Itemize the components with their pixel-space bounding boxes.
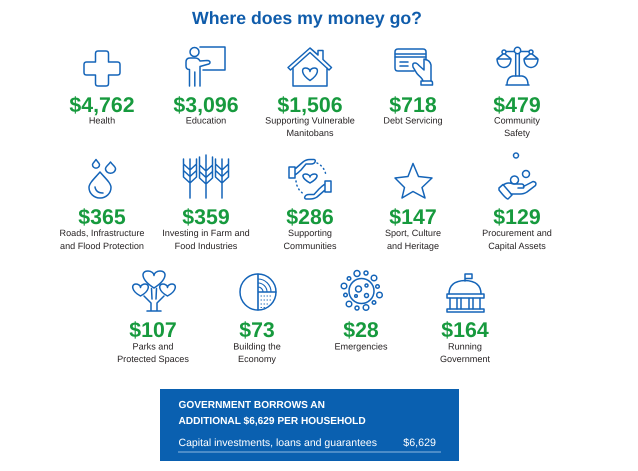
icon: scales of justice <box>497 47 538 85</box>
panel heading: GOVERNMENT BORROWS AN <box>178 400 325 411</box>
label line 2: and Heritage <box>387 241 439 251</box>
label: Emergencies <box>334 342 388 352</box>
label: Education <box>186 116 226 126</box>
label: Supporting <box>288 228 332 238</box>
label line 2: Protected Spaces <box>117 354 189 364</box>
icon: virus <box>341 270 382 310</box>
amount: $73 <box>239 318 275 342</box>
item: Procurement and Capital Assets <box>482 153 552 251</box>
label line 2: Economy <box>238 354 276 364</box>
label: Roads, Infrastructure <box>60 228 144 238</box>
label line 2: Capital Assets <box>488 241 546 251</box>
icon: hand holding card <box>395 49 432 85</box>
amount: $28 <box>343 318 379 342</box>
row value: $6,629 <box>403 437 436 449</box>
amount: $164 <box>441 318 489 342</box>
icon: teacher at board <box>186 47 225 86</box>
item: Investing in Farm and Food Industries <box>162 155 250 251</box>
item: Debt Servicing <box>383 49 443 126</box>
icon: government building <box>447 274 484 312</box>
label line 2: Manitobans <box>286 128 334 138</box>
item: Sport, Culture and Heritage <box>385 164 441 251</box>
panel: government borrowing <box>160 389 459 461</box>
label: Running <box>448 342 482 352</box>
label line 2: Government <box>440 354 490 364</box>
amount: $286 <box>286 205 334 229</box>
icon: hands around heart <box>289 160 331 199</box>
amount: $359 <box>182 205 230 229</box>
label: Procurement and <box>482 228 552 238</box>
label line 2: Safety <box>504 128 530 138</box>
item: Education <box>173 47 239 126</box>
icon: heart tree <box>133 271 175 311</box>
amount: $3,096 <box>173 93 239 117</box>
amount: $107 <box>129 318 177 342</box>
row label: Capital investments, loans and guarantees <box>178 437 377 449</box>
label: Supporting Vulnerable <box>265 116 355 126</box>
item: Running Government <box>440 274 490 364</box>
amount: $129 <box>493 205 541 229</box>
icon: segmented pie chart <box>240 274 276 310</box>
item: Community Safety <box>493 47 541 138</box>
item: Building the Economy <box>233 274 281 364</box>
label line 2: and Flood Protection <box>60 241 144 251</box>
label: Debt Servicing <box>383 116 443 126</box>
label: Investing in Farm and <box>162 228 250 238</box>
item: Parks and Protected Spaces <box>117 271 189 364</box>
amount: $4,762 <box>69 93 135 117</box>
item: Supporting Vulnerable Manitobans <box>265 48 355 138</box>
amount: $1,506 <box>277 93 343 117</box>
item: Roads, Infrastructure and Flood Protection <box>60 160 144 251</box>
label: Health <box>89 116 115 126</box>
icon: star <box>395 164 432 198</box>
amount: $718 <box>389 93 437 117</box>
amount: $479 <box>493 93 541 117</box>
label: Parks and <box>133 342 173 352</box>
panel heading line 2: ADDITIONAL $6,629 PER HOUSEHOLD <box>178 416 366 427</box>
icon: water drops <box>89 160 116 198</box>
item: Emergencies <box>334 270 388 352</box>
item: Supporting Communities <box>283 160 337 251</box>
panel background <box>160 389 459 461</box>
label line 2: Food Industries <box>175 241 238 251</box>
label: Community <box>494 116 540 126</box>
label: Sport, Culture <box>385 228 441 238</box>
label: Building the <box>233 342 281 352</box>
amount: $365 <box>78 205 126 229</box>
amount: $147 <box>389 205 437 229</box>
label line 2: Communities <box>283 241 337 251</box>
title: Where does my money go? <box>192 8 422 28</box>
icon: medical cross <box>84 51 120 86</box>
icon: hand with coins <box>499 153 536 199</box>
item: Health <box>69 51 135 126</box>
icon: wheat stalks <box>184 155 228 198</box>
icon: house with heart <box>288 48 332 86</box>
